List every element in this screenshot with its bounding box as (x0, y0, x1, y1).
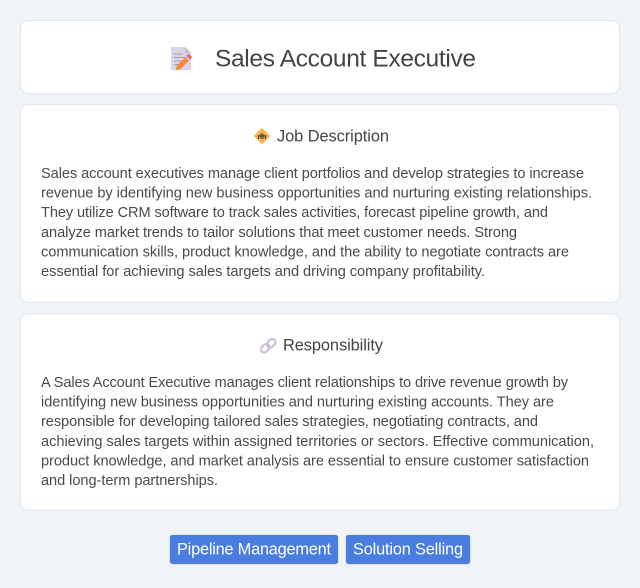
responsibility text: achieving sales targets within assigned territories or sectors. Effective communication, (41, 434, 594, 450)
panel: title (20, 20, 620, 94)
job description text: essential for achieving sales targets and driving company profitability. (41, 264, 485, 280)
job description text: Sales account executives manage client portfolios and develop strategies to increase (41, 166, 584, 182)
responsibility text (41, 375, 594, 489)
responsibility text: product knowledge, and market analysis are essential to ensure customer satisfaction (41, 453, 589, 469)
tag: pipeline management (170, 534, 338, 564)
responsibility text: responsible for developing tailored sales strategies, negotiating contracts, and (41, 414, 538, 430)
job description heading: Job Description (277, 128, 389, 146)
icon: document with pencil (171, 47, 192, 70)
responsibility text: identifying new business opportunities and nurturing existing accounts. They are (41, 395, 554, 411)
icon: orange diamond sign (254, 128, 270, 144)
title text: Sales Account Executive (215, 46, 476, 72)
tag: solution selling (346, 534, 470, 564)
job description text (41, 166, 592, 280)
job description text: communication skills, product knowledge, and the ability to negotiate contracts are (41, 244, 569, 260)
job description text: They utilize CRM software to track sales activities, forecast pipeline growth, and (41, 205, 548, 221)
responsibility heading: Responsibility (283, 336, 384, 354)
panel: job description (20, 104, 620, 302)
panel: responsibility (20, 314, 620, 510)
job description text: analyze market trends to tailor solutions that meet customer needs. Strong (41, 225, 517, 241)
icon: chain link (260, 338, 277, 354)
job description text: revenue by identifying new business opportunities and nurturing existing relationships. (41, 186, 592, 202)
responsibility text: and long-term partnerships. (41, 473, 218, 489)
responsibility text: A Sales Account Executive manages client relationships to drive revenue growth by (41, 375, 569, 391)
tag: pipeline management: Pipeline Management (177, 540, 331, 558)
tag: solution selling: Solution Selling (353, 540, 463, 558)
